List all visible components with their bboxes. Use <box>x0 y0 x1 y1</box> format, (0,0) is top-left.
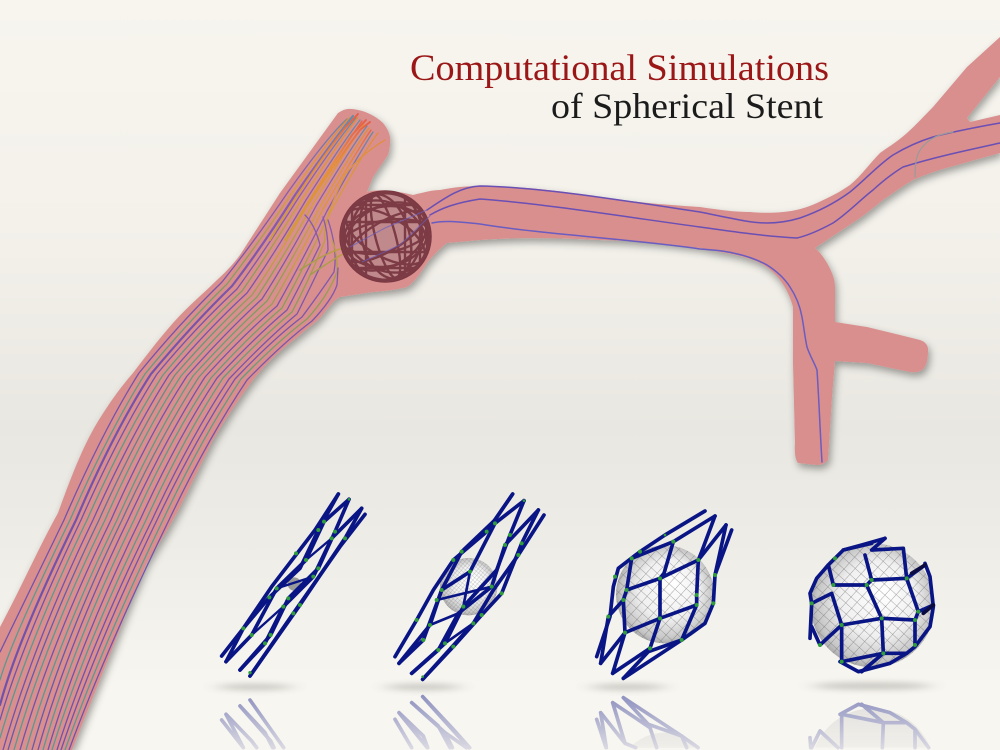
struts <box>810 538 933 672</box>
title line 1: Computational Simulations <box>410 48 829 89</box>
green stress spots <box>415 499 525 678</box>
reflection stage 2 <box>395 697 470 748</box>
balloon sphere <box>616 545 714 643</box>
wire mesh <box>340 192 430 282</box>
balloon sphere <box>440 558 497 615</box>
tiny balloon <box>288 577 301 591</box>
struts <box>395 494 544 679</box>
streamline lower <box>432 221 822 462</box>
streamline upper <box>427 123 1000 223</box>
aneurysm with spherical stent <box>339 190 432 283</box>
green stress spots <box>606 534 717 650</box>
green stress spots <box>241 498 350 674</box>
title <box>410 48 829 126</box>
floor reflections of stents <box>222 697 930 748</box>
title line 2: of Spherical Stent <box>551 86 823 126</box>
stent stage 4 <box>810 538 935 672</box>
stent stage 3 <box>597 511 732 678</box>
streamline middle <box>430 143 1000 238</box>
stent stage 2 <box>395 494 544 679</box>
gray streamline <box>915 132 953 177</box>
floor shadows <box>217 682 932 690</box>
aneurysm sphere <box>340 191 431 282</box>
struts <box>222 494 365 676</box>
reflection stage 3 <box>597 698 700 748</box>
green stress spots <box>810 556 920 664</box>
balloon sphere <box>811 543 935 667</box>
stent stage 1 <box>222 494 365 676</box>
bloodstream lines: main artery <box>0 114 385 750</box>
reflection stage 4 <box>810 704 930 748</box>
flow inside aneurysm <box>350 210 430 262</box>
struts <box>597 511 732 678</box>
reflection stage 1 <box>222 700 284 748</box>
bloodstream lines: branches <box>427 123 1000 462</box>
